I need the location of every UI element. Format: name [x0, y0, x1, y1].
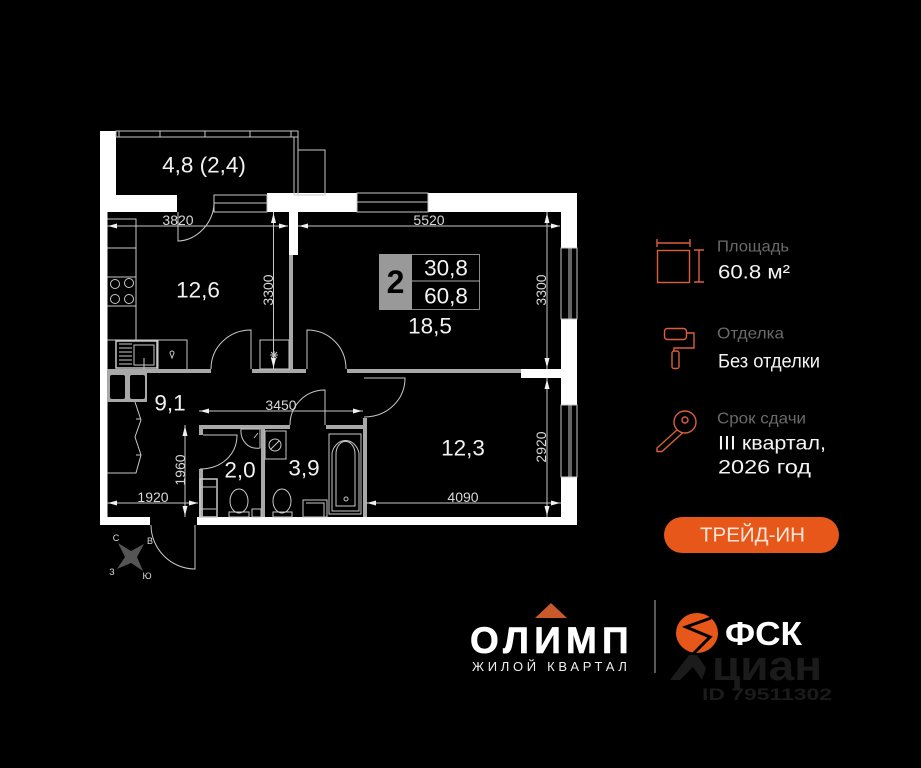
room area: balcony: 4,8 (2,4) [162, 152, 246, 178]
logo: Olimp: ОЛИМП [470, 620, 634, 661]
compass: З [109, 567, 115, 577]
info: delivery date: Срок сдачи [717, 410, 806, 428]
info: delivery date: III квартал, [718, 434, 826, 454]
info: area [717, 238, 790, 284]
dimension: 4090: 4090 [447, 489, 479, 505]
info: delivery date: 2026 год [718, 458, 811, 478]
dimension: 3300 living room: 3300 [533, 274, 549, 306]
area badge: 30,8 [424, 256, 468, 280]
dimension: 1920: 1920 [137, 489, 169, 505]
exterior walls [100, 131, 577, 525]
logo: FSK [676, 613, 803, 654]
room area: bedroom: 12,3 [441, 436, 485, 460]
dimension: 1960: 1960 [172, 454, 188, 486]
compass: Ю [142, 571, 152, 581]
watermark: cian [670, 642, 832, 704]
info: delivery date [717, 410, 826, 478]
watermark: cian: ID 79511302 [702, 685, 832, 704]
logo: FSK: ФСК [725, 615, 803, 652]
logo: Olimp: ЖИЛОЙ КВАРТАЛ [472, 659, 631, 674]
icon: key [657, 411, 696, 452]
divider [654, 600, 656, 673]
icon: paint roller [664, 328, 694, 368]
compass: С [113, 533, 120, 543]
logo: Olimp [470, 603, 634, 674]
info: area: 60.8 м² [718, 262, 790, 284]
room area: hall: 9,1 [154, 390, 186, 416]
kitchen units [107, 219, 289, 369]
info: area: Площадь [717, 238, 789, 256]
area badge [379, 254, 480, 310]
dimension: 3450: 3450 [265, 397, 297, 413]
dimension: 3820: 3820 [162, 212, 194, 228]
info: finish: Без отделки [718, 352, 820, 372]
interior partitions [107, 255, 521, 517]
room area: kitchen: 12,6 [176, 278, 220, 302]
trade-in button: ТРЕЙД-ИН [700, 522, 805, 546]
area badge: 60,8 [424, 284, 468, 308]
dimension lines [107, 212, 561, 517]
compass [109, 533, 153, 581]
area badge: 2 [387, 264, 404, 300]
info: finish [717, 326, 820, 372]
dimension: 3300 kitchen: 3300 [260, 274, 276, 306]
info: finish: Отделка [717, 326, 784, 342]
room area: bathroom: 3,9 [288, 456, 320, 480]
room area: toilet: 2,0 [224, 458, 256, 482]
icon: area [657, 239, 704, 282]
room area: living room: 18,5 [408, 314, 452, 338]
hall fridge and wardrobe [107, 373, 147, 473]
compass: В [147, 536, 153, 546]
trade-in button [664, 517, 839, 553]
dimension: 5520: 5520 [413, 212, 445, 228]
dimension arrowheads [108, 213, 560, 516]
watermark: cian: циан [712, 642, 822, 689]
bathroom fixtures [200, 429, 361, 517]
balcony glazing and radiator [116, 131, 325, 212]
floor plan [100, 131, 577, 581]
dimension: 2920: 2920 [533, 431, 549, 463]
right windows [561, 248, 577, 477]
doors [151, 203, 405, 569]
top window [357, 193, 428, 212]
